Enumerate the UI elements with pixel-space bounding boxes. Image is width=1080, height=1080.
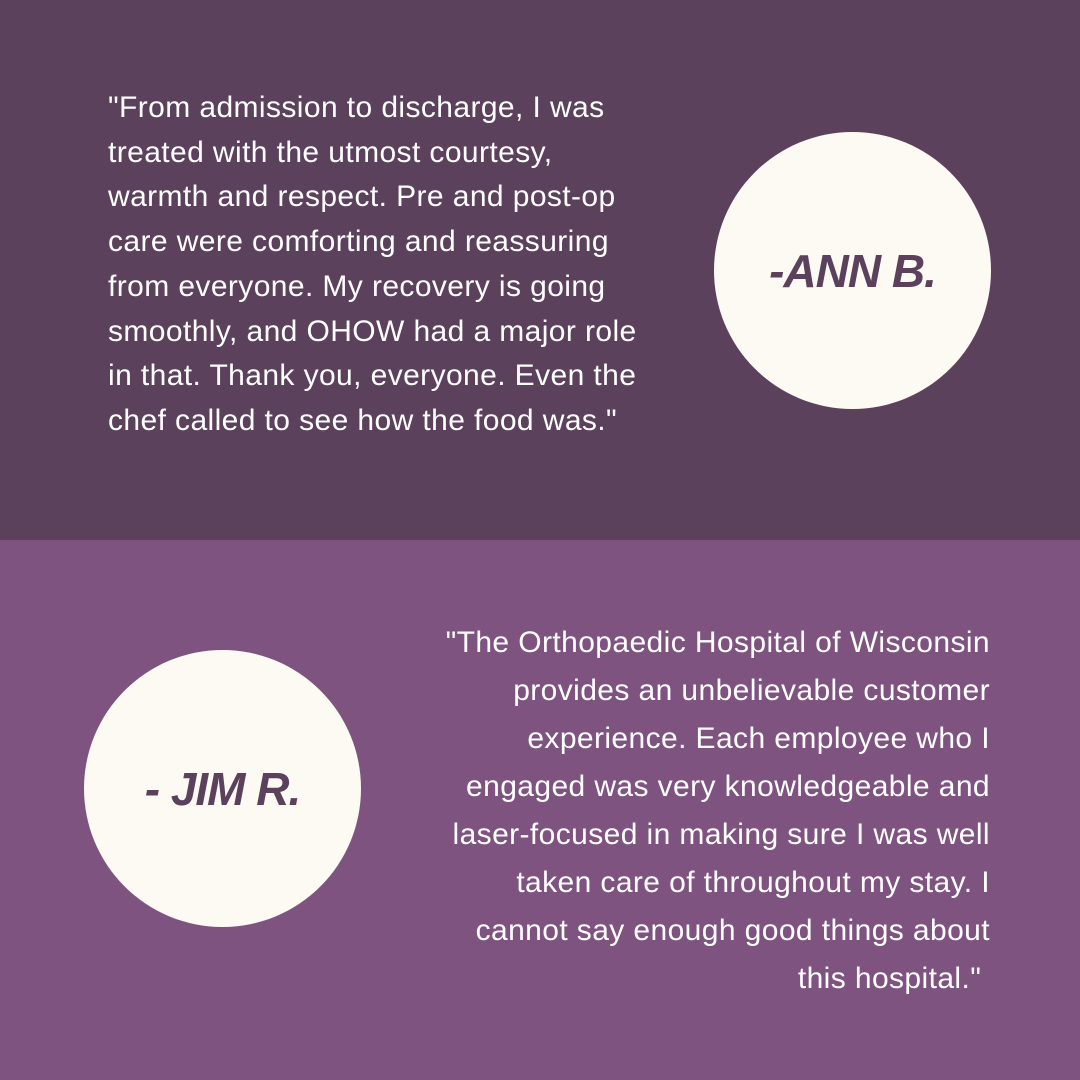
quote: Ann B.: smoothly, and OHOW had a major role — [108, 315, 637, 348]
circle: Ann B. — [714, 132, 991, 409]
quote: Jim R.: laser-focused in making sure I was well — [453, 818, 990, 851]
panel: bottom testimonial — [0, 540, 1080, 1080]
circle: Jim R. — [84, 650, 361, 927]
circle: Jim R.: - JIM R. — [145, 762, 300, 814]
quote: Ann B.: from everyone. My recovery is going — [108, 270, 606, 303]
quote: Jim R.: provides an unbelievable customer — [513, 674, 990, 707]
quote: Ann B.: treated with the utmost courtesy, — [108, 136, 553, 169]
quote: Jim R.: cannot say enough good things about — [476, 914, 990, 947]
quote: Ann B.: in that. Thank you, everyone. Even the — [108, 359, 636, 392]
quote: Ann B.: chef called to see how the food was." — [108, 404, 617, 437]
panel: top testimonial — [0, 0, 1080, 540]
quote: Jim R.: taken care of throughout my stay. I — [516, 866, 990, 899]
quote: Ann B. — [108, 91, 637, 437]
quote: Ann B.: warmth and respect. Pre and post-op — [108, 180, 616, 213]
quote: Ann B.: "From admission to discharge, I was — [108, 91, 604, 124]
quote: Jim R.: engaged was very knowledgeable and — [466, 770, 990, 803]
circle: Ann B.: -ANN B. — [769, 244, 936, 296]
quote: Jim R.: "The Orthopaedic Hospital of Wisconsin — [446, 626, 990, 659]
quote: Jim R.: experience. Each employee who I — [527, 722, 990, 755]
quote: Ann B.: care were comforting and reassuring — [108, 225, 609, 258]
quote: Jim R. — [446, 626, 990, 995]
quote: Jim R.: this hospital." — [798, 962, 981, 995]
